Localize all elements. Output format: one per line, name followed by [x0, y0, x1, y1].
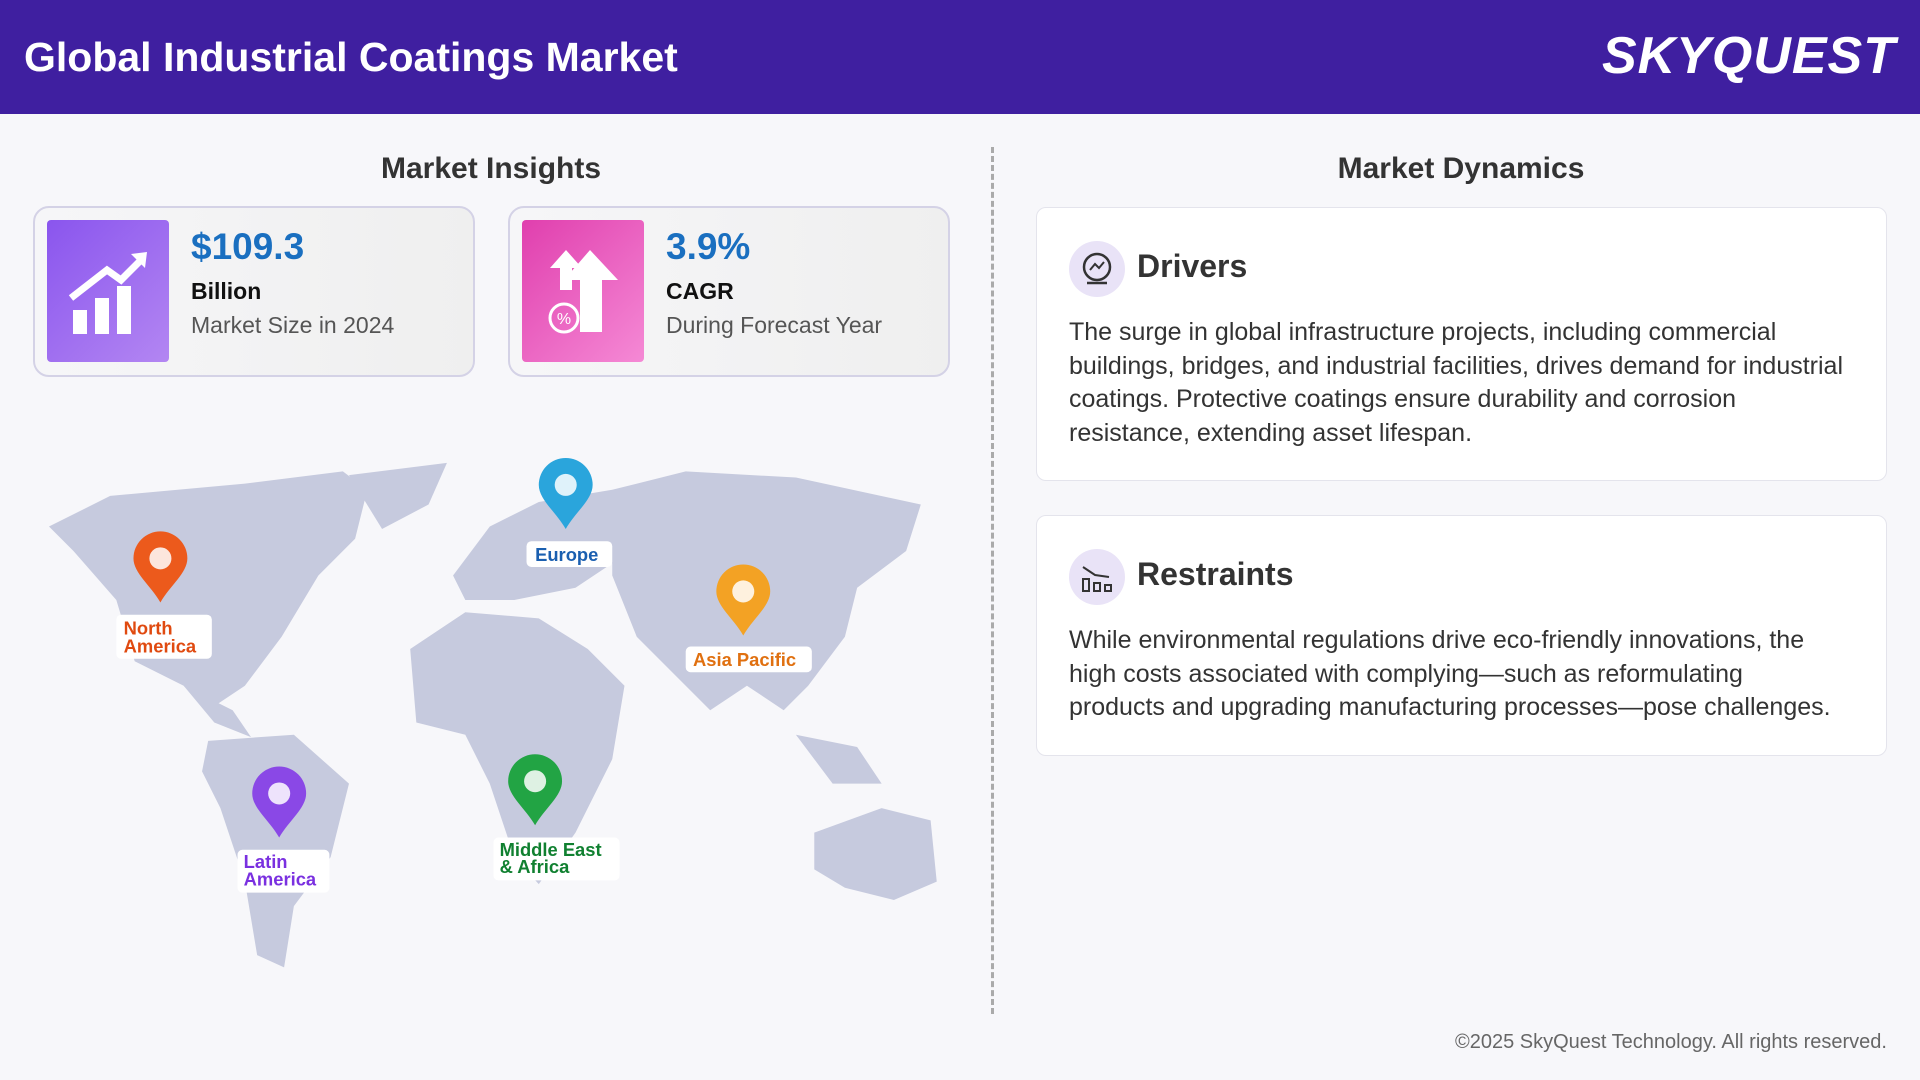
pin: latin america: America [244, 868, 317, 889]
footer: ©2025 SkyQuest Technology. All rights reserved. [1455, 1031, 1887, 1053]
pin: north america [116, 531, 212, 659]
pin: north america: North [124, 617, 173, 638]
pin: middle east africa: & Africa [500, 856, 570, 877]
panel: restraints: Restraints [1137, 556, 1294, 592]
card: CAGR [508, 206, 950, 377]
card: CAGR: 3.9% [666, 226, 750, 267]
icon: restraints [1069, 549, 1125, 605]
panel: restraints: While environmental regulations drive eco-friendly innovations, the high costs associated with complying—such as reformulating products and upgrading manufacturing processes—pose challenges. [1069, 626, 1831, 721]
pin: asia pacific [686, 564, 812, 672]
card: market size: $109.3 [191, 226, 304, 267]
pin: europe: Europe [535, 544, 598, 565]
title: Global Industrial Coatings Market [24, 34, 678, 80]
pin: north america: America [124, 636, 197, 657]
card: CAGR: CAGR [666, 278, 734, 304]
icon: drivers [1069, 241, 1125, 297]
card: market size: Billion [191, 278, 261, 304]
pin: latin america [238, 767, 329, 893]
card: market size [33, 206, 475, 377]
card: CAGR: During Forecast Year [666, 312, 882, 338]
logo: SKYQUEST [1602, 27, 1896, 85]
heading: market insights: Market Insights [381, 152, 601, 185]
panel: drivers: Drivers [1137, 248, 1247, 284]
heading: market dynamics: Market Dynamics [1338, 152, 1584, 185]
icon: arrows: % [557, 311, 571, 328]
panel: drivers [1036, 207, 1887, 481]
header bar [0, 0, 1920, 114]
pin: middle east africa [493, 754, 620, 880]
icon: bar chart [47, 220, 169, 362]
panel: restraints [1036, 515, 1887, 756]
pin: europe [527, 458, 612, 567]
pin: asia pacific: Asia Pacific [693, 649, 796, 670]
pin: latin america: Latin [244, 851, 288, 872]
panel: drivers: The surge in global infrastructure projects, including commercial buildings, bridges, and industrial facilities, drives demand for industrial coatings. Protective coatings ensure durability and corrosion resistance, extending asset lifespan. [1069, 318, 1843, 447]
pin: middle east africa: Middle East [500, 839, 602, 860]
icon: arrows [522, 220, 644, 362]
card: market size: Market Size in 2024 [191, 312, 394, 338]
